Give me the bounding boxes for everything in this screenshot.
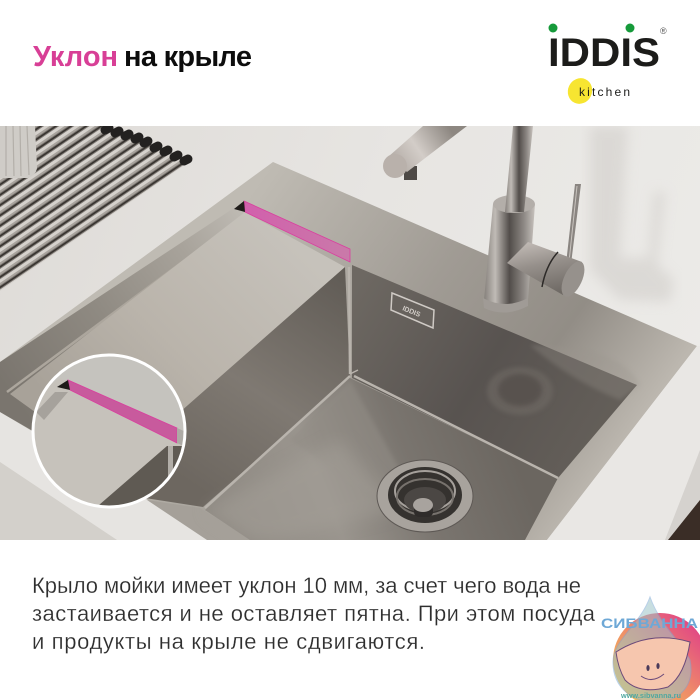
text block: description xyxy=(32,573,596,654)
watermark: Sibvanna badge xyxy=(601,597,700,700)
text block: description: Крыло мойки имеет уклон 10 мм, за счет чего вода не xyxy=(32,573,581,598)
counter reflection strip, lower left xyxy=(0,412,215,540)
spout xyxy=(383,126,467,180)
drainboard wing xyxy=(10,214,344,412)
ceramic dish xyxy=(0,126,37,178)
faucet xyxy=(383,126,589,313)
base ring xyxy=(483,298,528,313)
reflection of faucet xyxy=(487,367,553,415)
counter front right edge xyxy=(547,346,700,540)
rim left band xyxy=(0,218,226,430)
corner seams xyxy=(205,267,558,508)
logo: IDDIS kitchen: IDDIS xyxy=(548,31,660,75)
body xyxy=(484,197,535,306)
text block: description: и продукты на крыле не сдвигаются. xyxy=(32,629,425,654)
drain strainer xyxy=(377,460,473,532)
front bright strip xyxy=(147,500,215,540)
title: на крыле xyxy=(124,41,252,73)
handle xyxy=(507,242,582,295)
panel: sink photo xyxy=(0,126,700,540)
faucet shadow on wall xyxy=(590,126,674,302)
sink bowl xyxy=(130,265,640,540)
icon: smiling bathtub xyxy=(616,638,690,690)
title: Уклон xyxy=(33,41,118,73)
left wall xyxy=(130,267,350,507)
watermark: Sibvanna badge: СИБВАННА xyxy=(601,615,698,631)
watermark: Sibvanna badge: www.sibvanna.ru xyxy=(620,691,681,700)
logo: IDDIS kitchen: kitchen xyxy=(579,85,630,99)
callout: magnified detail xyxy=(30,352,190,512)
dish rack xyxy=(0,126,192,291)
title xyxy=(33,41,252,73)
text block: description: застаивается и не оставляет пятна. При этом посуда xyxy=(32,601,596,626)
pink slope highlight xyxy=(234,201,350,262)
floor xyxy=(205,378,558,540)
back wall xyxy=(352,265,637,478)
logo: IDDIS kitchen xyxy=(548,24,667,108)
lever xyxy=(566,184,581,264)
neck xyxy=(505,126,533,212)
logo plate: IDDIS xyxy=(401,305,421,319)
icon: yellow blob xyxy=(564,74,596,108)
steel rim xyxy=(0,162,697,540)
logo: IDDIS kitchen: ® xyxy=(660,26,667,36)
logo plate xyxy=(391,293,434,328)
